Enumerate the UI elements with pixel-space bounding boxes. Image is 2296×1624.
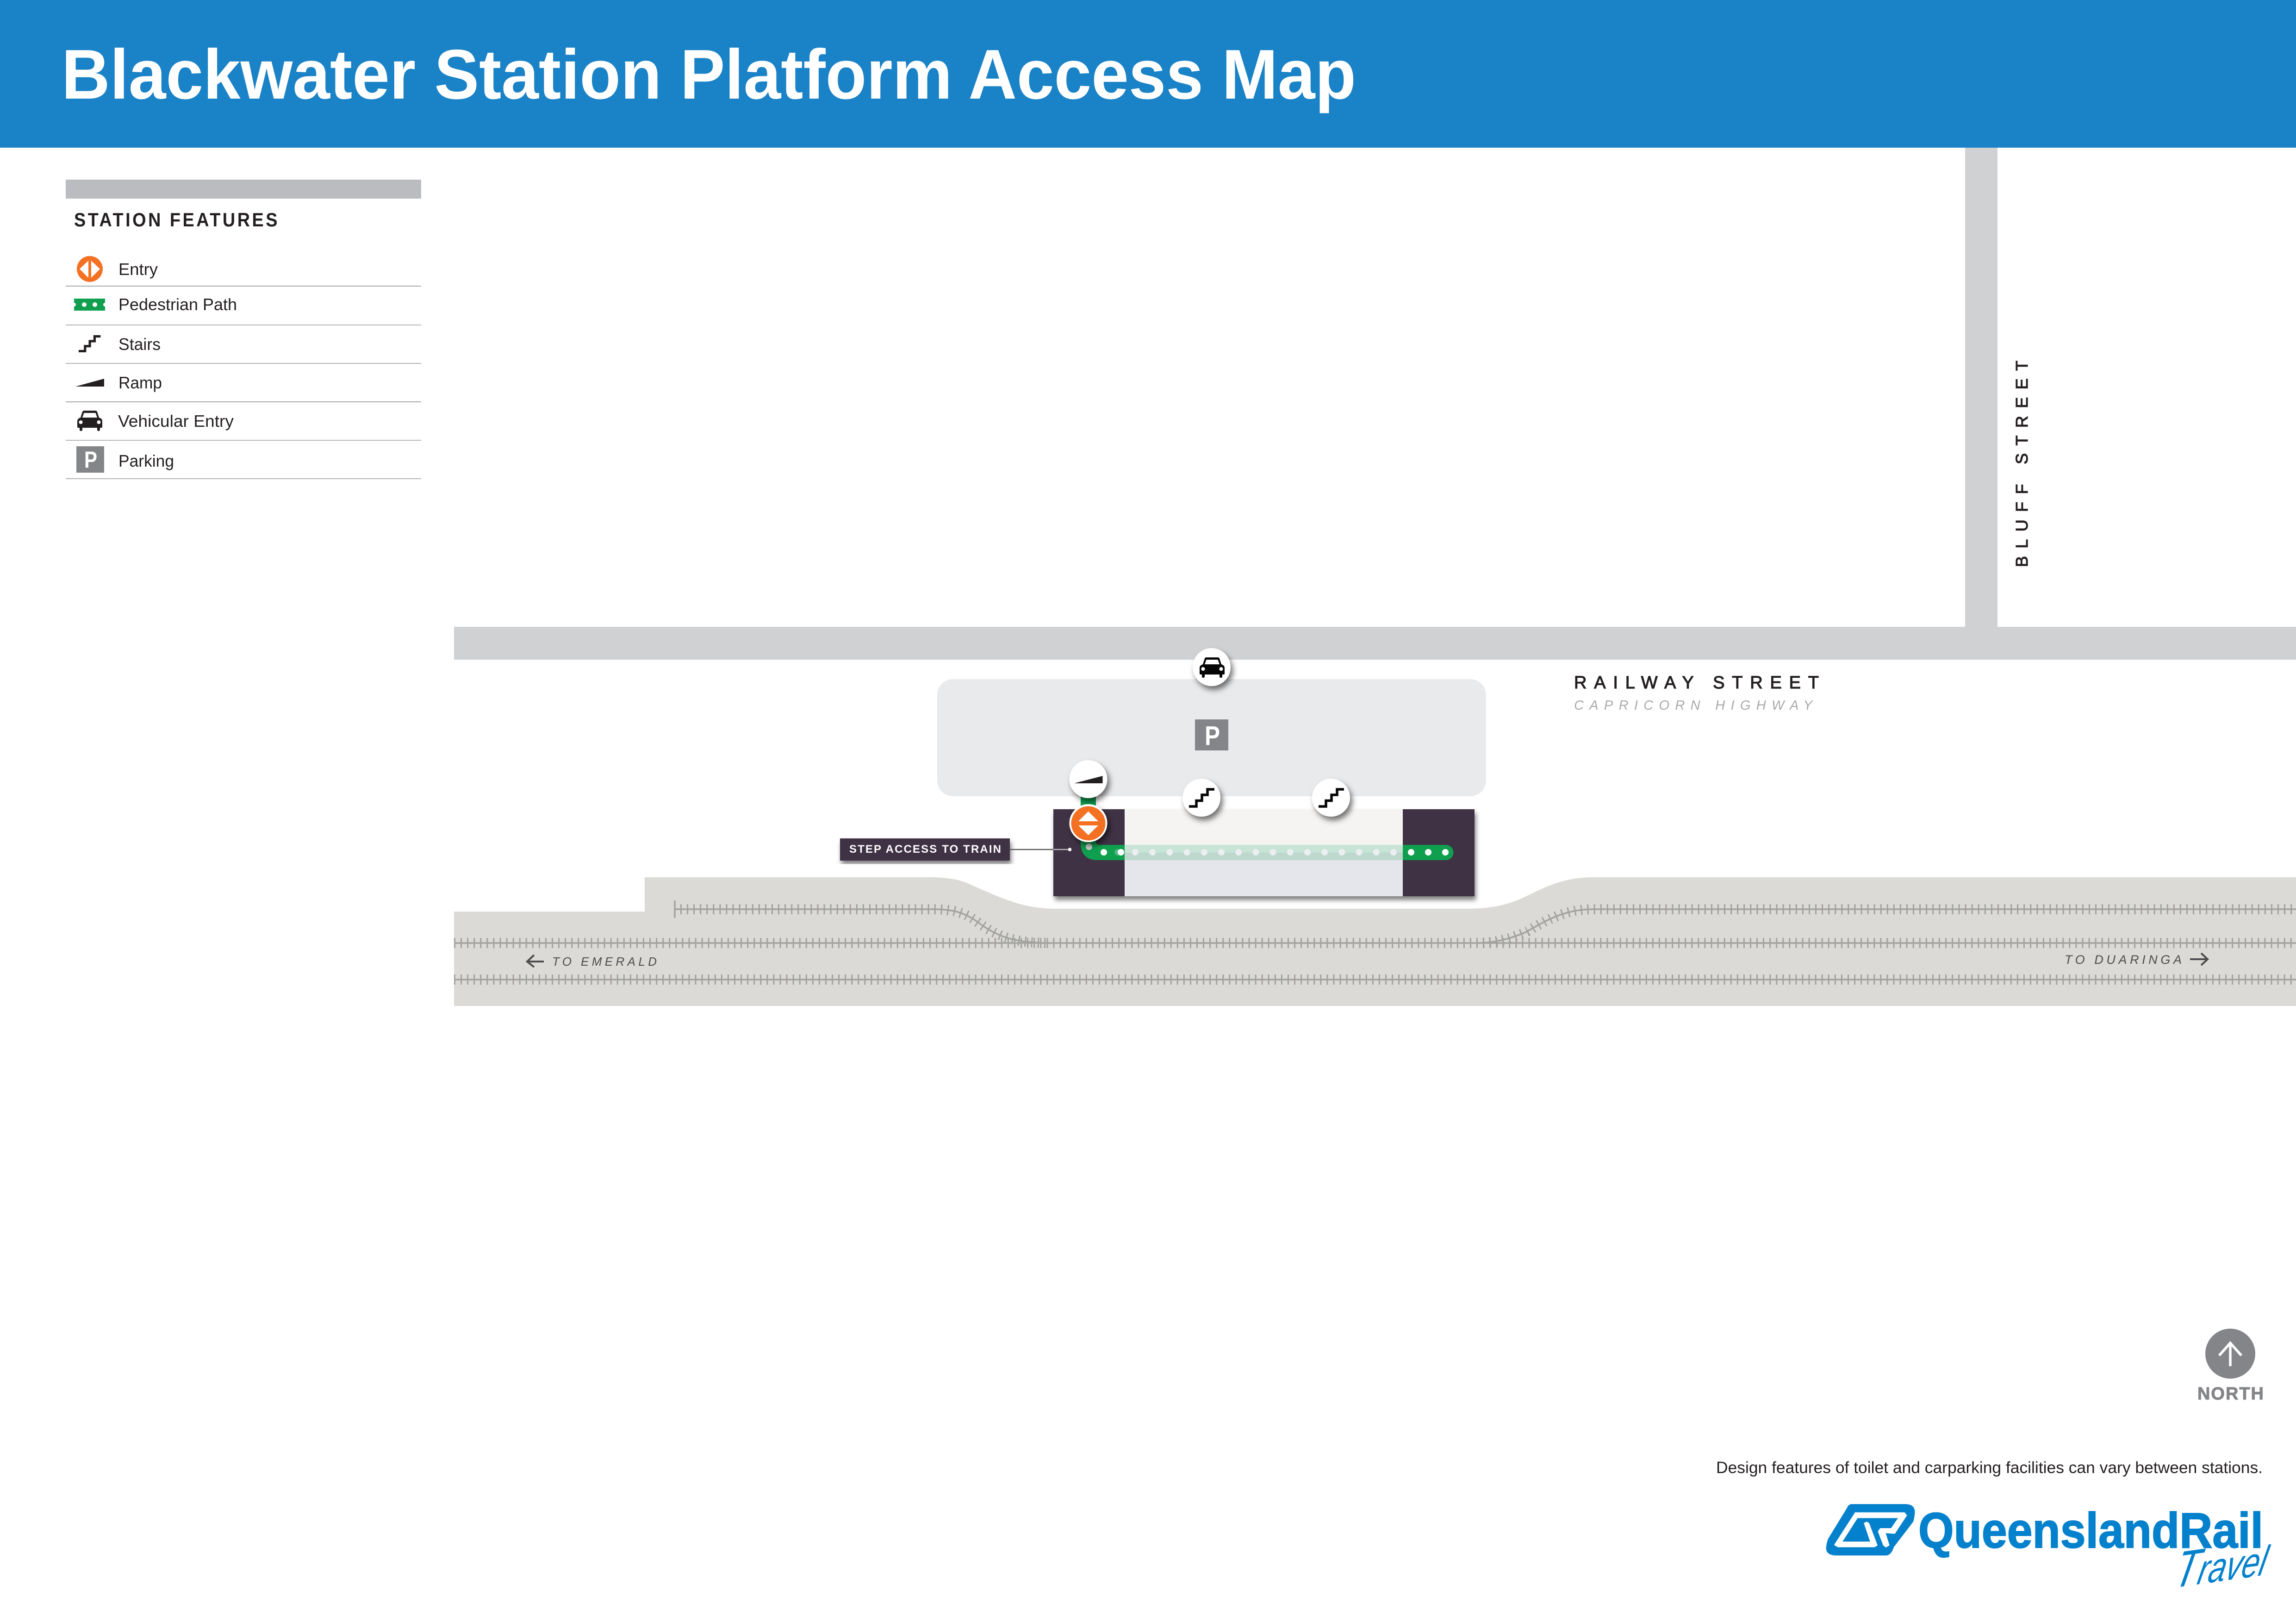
icon: stairs badge east xyxy=(1312,779,1350,817)
road: Railway Street xyxy=(454,627,2296,660)
panel: station features legend xyxy=(66,180,421,479)
pedestrian path xyxy=(1081,794,1454,860)
street label: Capricorn Highway: CAPRICORN HIGHWAY xyxy=(1574,698,1814,713)
legend heading: STATION FEATURES xyxy=(74,209,280,231)
icon: vehicular entry badge xyxy=(1193,648,1231,686)
legend row: vehicular entry xyxy=(77,411,234,431)
icon: stairs badge west xyxy=(1182,779,1220,817)
icon: parking sign: P xyxy=(1205,721,1220,751)
platform lower xyxy=(1125,852,1403,896)
west platform ramp block xyxy=(1053,809,1125,896)
platform upper xyxy=(1125,809,1403,853)
legend row: ramp xyxy=(75,373,162,392)
north indicator xyxy=(2197,1329,2264,1404)
east platform ramp block xyxy=(1403,809,1475,896)
icon: parking sign xyxy=(1195,719,1228,751)
legend row: parking: Parking xyxy=(118,451,174,470)
logo: Queensland Rail Travel xyxy=(1826,1502,2275,1599)
legend row: stairs: Stairs xyxy=(118,335,161,354)
direction label: to Duaringa: TO DUARINGA xyxy=(2065,953,2182,967)
main track south xyxy=(454,974,2296,985)
logo mark xyxy=(1826,1504,1915,1555)
street label: Railway Street: RAILWAY STREET xyxy=(1574,673,1819,693)
rail corridor ground xyxy=(454,877,2296,1006)
legend row: pedestrian path: Pedestrian Path xyxy=(118,295,237,314)
logo wordmark: QueenslandRail xyxy=(1918,1502,2263,1558)
title: Blackwater Station Platform Access Map xyxy=(62,35,1356,114)
legend row: ramp: Ramp xyxy=(118,373,162,392)
road: Bluff Street xyxy=(1965,148,1997,627)
legend row: parking: P xyxy=(84,447,97,473)
railway tracks xyxy=(454,900,2296,980)
icon: entry badge xyxy=(1069,804,1107,842)
main track north xyxy=(454,938,2296,948)
direction label: to Emerald: TO EMERALD xyxy=(552,955,657,968)
legend row: entry xyxy=(77,256,158,282)
footnote: Design features of toilet and carparking facilities can vary between stations. xyxy=(1716,1459,2263,1477)
north arrow circle xyxy=(2205,1329,2255,1379)
callout: step access to train xyxy=(840,838,1071,861)
western siding xyxy=(675,900,1051,943)
platform and end blocks xyxy=(1053,809,1475,896)
north label: NORTH xyxy=(2197,1384,2264,1404)
panel: car park xyxy=(937,679,1486,796)
legend row: vehicular entry: Vehicular Entry xyxy=(118,412,234,431)
header banner xyxy=(0,0,2296,148)
callout: step access to train: STEP ACCESS TO TRAIN xyxy=(849,843,1001,856)
legend row: stairs xyxy=(79,335,161,354)
legend row: parking xyxy=(76,446,174,473)
street label: Bluff Street: BLUFF STREET xyxy=(2012,361,2031,567)
icon: ramp badge xyxy=(1069,760,1107,798)
logo tagline: Travel xyxy=(2170,1528,2275,1599)
legend row: entry: Entry xyxy=(118,260,158,279)
eastern siding xyxy=(1476,909,2296,943)
legend header bar xyxy=(66,180,421,199)
